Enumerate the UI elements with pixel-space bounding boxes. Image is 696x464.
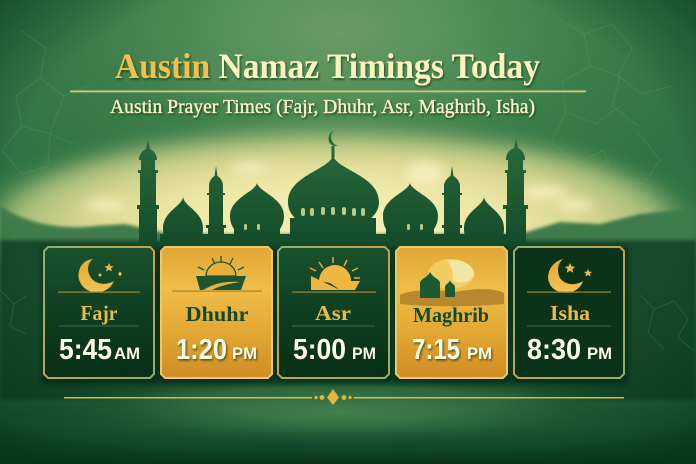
card: Maghrib — [396, 247, 507, 378]
card: Asr: Asr — [315, 301, 351, 325]
icon: crescent and stars — [79, 259, 122, 292]
card: Dhuhr — [161, 247, 272, 378]
time: 7:15 — [412, 334, 460, 366]
time: PM — [587, 344, 612, 363]
card: Dhuhr: Dhuhr — [186, 302, 248, 326]
card: Isha: Isha — [550, 301, 591, 325]
title rule — [70, 90, 586, 92]
geometric pattern: corners — [0, 20, 694, 351]
icon: domes at sunset — [400, 259, 504, 306]
side domes — [230, 183, 284, 248]
time — [527, 334, 612, 366]
card: Fajr — [44, 247, 154, 378]
right minaret — [503, 138, 528, 248]
card: Asr — [278, 247, 389, 378]
time: 8:30 — [527, 334, 581, 366]
time: 5:00 — [293, 334, 346, 366]
subtitle: Austin Prayer Times (Fajr, Dhuhr, Asr, Maghrib, Isha) — [110, 97, 535, 118]
left minaret — [137, 140, 159, 248]
title: Austin Namaz Timings Today — [115, 46, 540, 86]
icon: sun over dunes — [196, 256, 246, 290]
time: AM — [114, 344, 140, 363]
card: Isha — [514, 247, 624, 378]
time: PM — [232, 344, 257, 363]
mosque windows — [244, 207, 423, 230]
icon: setting sun — [310, 257, 360, 290]
icon: crescent and stars — [548, 259, 592, 293]
time: 1:20 — [176, 334, 227, 366]
small minarets — [206, 166, 226, 248]
card: Fajr: Fajr — [80, 301, 118, 325]
mosque silhouette — [137, 130, 528, 248]
time: 5:45 — [59, 334, 112, 366]
time: PM — [352, 344, 376, 363]
time: PM — [467, 344, 492, 363]
main dome — [288, 156, 379, 222]
small domes — [163, 197, 203, 248]
time — [293, 334, 376, 366]
card: Maghrib: Maghrib — [413, 303, 489, 327]
crescent on main dome — [329, 130, 338, 146]
bottom divider ornament — [64, 389, 624, 405]
card shadows — [42, 248, 628, 384]
